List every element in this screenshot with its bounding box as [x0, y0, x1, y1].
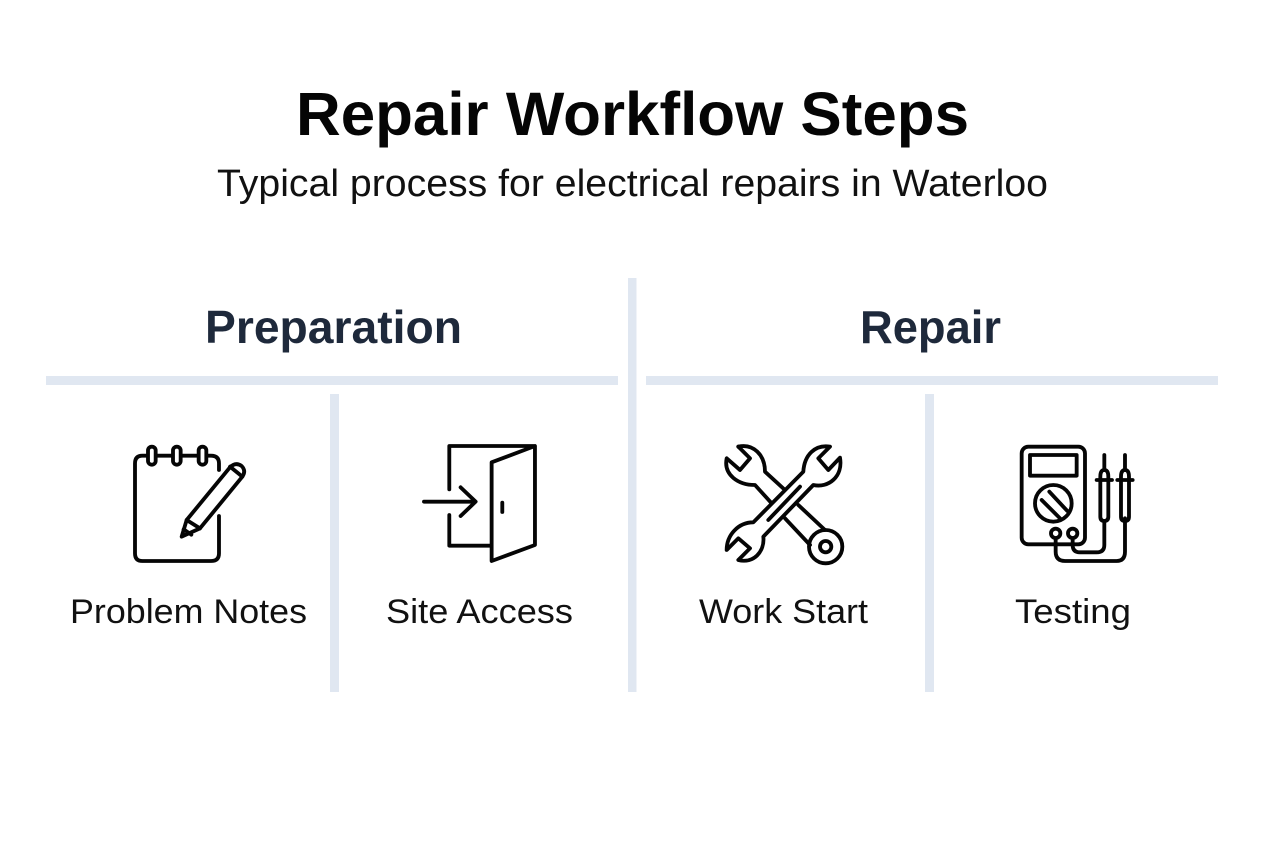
icon: door with arrow	[424, 446, 535, 561]
label: Testing: Testing	[1015, 593, 1131, 631]
icon: notepad and pencil	[135, 447, 244, 561]
label: Site Access: Site Access	[386, 593, 573, 631]
label: Problem Notes: Problem Notes	[70, 593, 307, 631]
icon: crossed wrenches	[726, 446, 842, 563]
subtitle: Typical process for electrical repairs in Waterloo	[217, 163, 1048, 205]
label: Work Start: Work Start	[699, 593, 868, 631]
title: Repair Workflow Steps	[296, 80, 969, 148]
heading: Repair: Repair	[860, 301, 1001, 353]
icon: multimeter	[1022, 447, 1133, 561]
heading: Preparation: Preparation	[205, 301, 462, 353]
